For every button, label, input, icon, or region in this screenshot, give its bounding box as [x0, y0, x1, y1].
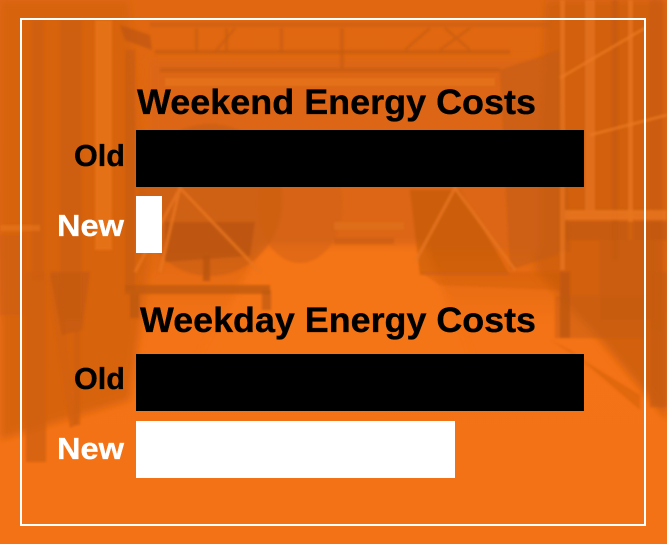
bar: old weekend [136, 130, 584, 187]
bar: new weekday [136, 421, 455, 478]
tank and stand left [138, 124, 282, 276]
label: old weekday: Old [74, 361, 125, 396]
chart: weekend energy costs [57, 83, 584, 253]
right lower structures [555, 296, 645, 338]
label: new weekday: New [57, 431, 125, 466]
bar: old weekday [136, 354, 584, 411]
bar: new weekend [136, 196, 162, 253]
heading: weekend energy costs: Weekend Energy Costs [137, 83, 536, 122]
left posts lower [26, 272, 46, 462]
label: old weekend: Old [74, 138, 125, 173]
label: new weekend: New [57, 208, 125, 243]
heading: weekday energy costs: Weekday Energy Costs [140, 301, 536, 340]
stand right [410, 190, 510, 275]
chart: weekday energy costs [57, 301, 584, 478]
